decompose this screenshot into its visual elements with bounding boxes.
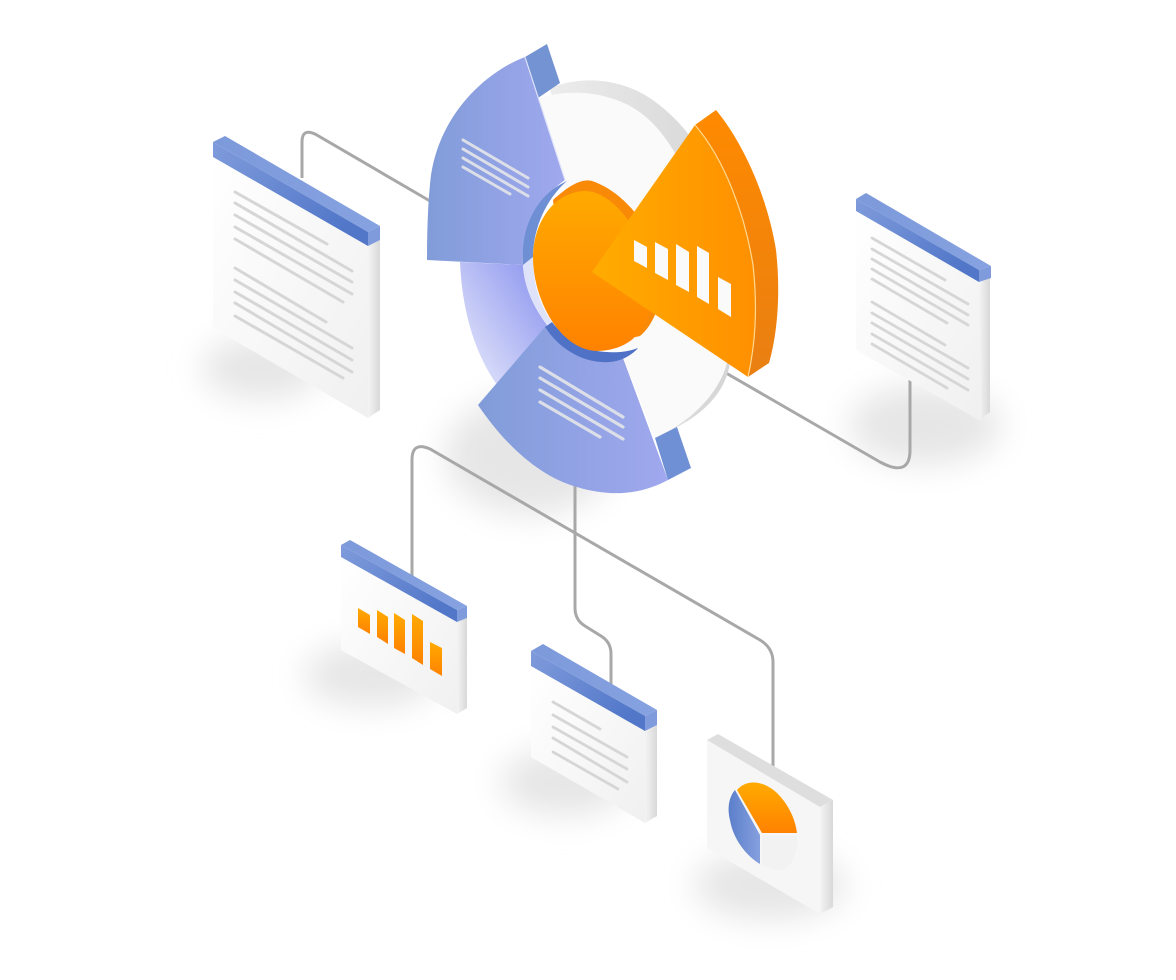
orange wedge [592, 125, 755, 377]
orange hub front [533, 191, 652, 351]
upper blue sector [427, 57, 565, 265]
header bar [213, 136, 380, 246]
white bars [634, 240, 731, 317]
pie: pale slice [762, 836, 797, 870]
orange bars [358, 608, 442, 676]
ground shadows [202, 336, 1001, 920]
upper inner crescent [523, 181, 567, 265]
document: large left [213, 136, 380, 418]
lower inner crescent [545, 322, 638, 362]
text lines [463, 140, 528, 196]
text lines [235, 192, 352, 378]
pale sector [460, 262, 547, 395]
text lines [872, 238, 968, 390]
header bar [856, 193, 991, 282]
pale inner band [523, 257, 552, 325]
document: bar chart [341, 540, 467, 714]
document: right [856, 193, 991, 420]
pie: blue slice [729, 790, 760, 864]
text lines [540, 367, 623, 439]
lower blue sector side [655, 427, 691, 480]
panel: pie chart card [707, 734, 833, 914]
text lines [553, 702, 627, 789]
header bar [341, 540, 467, 622]
disc rim [550, 80, 738, 438]
document: lower centre [531, 644, 657, 823]
header bar [531, 644, 657, 731]
pie: orange slice [737, 782, 797, 833]
orange hub back [553, 180, 660, 345]
lower blue sector [478, 327, 668, 493]
connector lines [302, 132, 910, 768]
upper blue sector side [525, 44, 560, 98]
white disc [538, 93, 727, 438]
main pie chart [427, 44, 778, 493]
orange wedge side [695, 110, 778, 377]
